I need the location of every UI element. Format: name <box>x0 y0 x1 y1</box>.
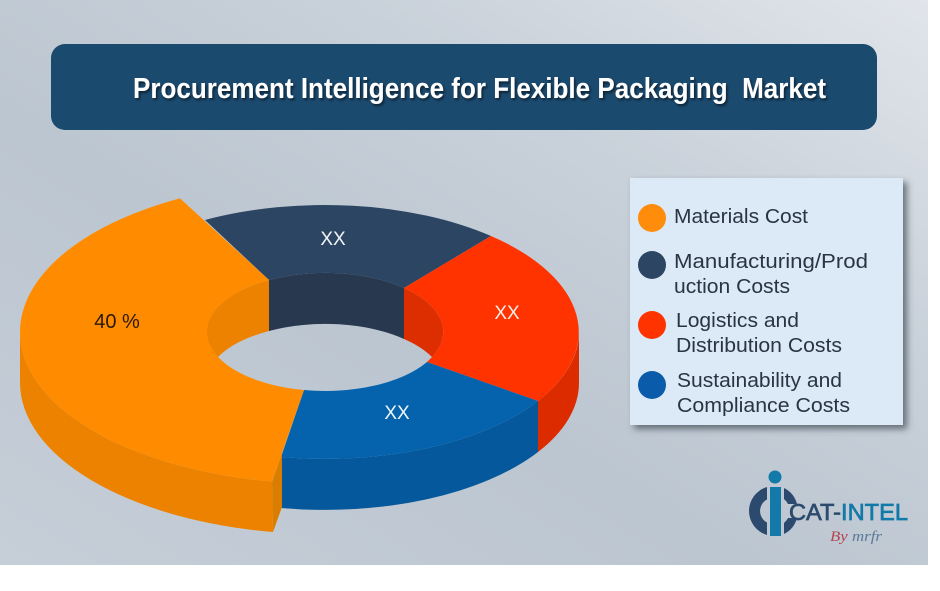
legend item: manufacturing/production costs: Manufacturing/Prod <box>674 251 868 273</box>
legend item: logistics and distribution costs: Distribution Costs <box>676 335 842 357</box>
title banner <box>51 44 877 130</box>
title: Procurement Intelligence for Flexible Packaging Market <box>133 73 826 105</box>
logo: CAT-INTEL by mrfr <box>749 470 908 545</box>
legend item: materials cost: Materials Cost <box>674 206 808 228</box>
legend item: logistics and distribution costs: Logistics and <box>676 310 799 332</box>
segment: manufacturing navy <box>205 205 491 288</box>
segment: materials orange <box>20 198 304 482</box>
logo tagline: By mrfr <box>830 529 882 545</box>
legend item: sustainability and compliance costs: Compliance Costs <box>677 395 850 417</box>
outer wall: blue <box>281 401 538 510</box>
segment: logistics red <box>404 236 579 401</box>
legend item: manufacturing/production costs: uction Costs <box>674 276 790 298</box>
inner wall: navy <box>269 273 404 339</box>
legend panel <box>630 178 903 425</box>
inner wall: red <box>404 288 443 357</box>
legend item: sustainability and compliance costs: Sustainability and <box>677 370 842 392</box>
label: red XX: XX <box>494 303 520 324</box>
outer wall: orange <box>20 332 273 532</box>
outer wall: red <box>538 332 579 452</box>
legend item: logistics and distribution costs <box>638 310 842 357</box>
inner wall: orange <box>207 280 269 357</box>
logo wordmark: CAT-INTEL <box>789 499 908 525</box>
logo mark <box>749 470 797 536</box>
legend item: materials cost <box>638 204 808 232</box>
label: blue XX: XX <box>384 403 410 424</box>
segment: sustainability blue <box>281 362 538 459</box>
orange side face <box>272 453 282 532</box>
legend item: sustainability and compliance costs <box>638 370 850 417</box>
label: navy XX: XX <box>320 229 346 250</box>
legend item: manufacturing/production costs <box>638 251 868 298</box>
3D donut chart <box>20 198 579 532</box>
label: 40 %: 40 % <box>94 311 140 333</box>
